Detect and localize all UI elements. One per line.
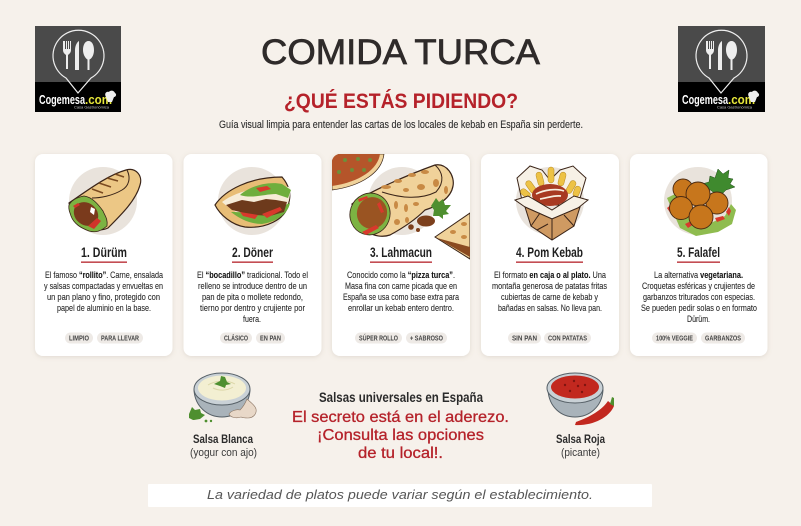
subtitle: ¿QUÉ ESTÁS PIDIENDO? <box>284 90 518 113</box>
heading: 5. Falafel <box>677 245 720 260</box>
heading: 1. Dürüm <box>81 245 127 260</box>
icon: durum wrap <box>69 167 141 235</box>
logo left: Casa Gastronómica <box>74 106 109 110</box>
footer note: La variedad de platos puede variar según el establecimiento. <box>207 487 593 502</box>
description: bañadas en salsas. No lleva pan. <box>498 303 602 313</box>
icon: falafel <box>664 167 736 236</box>
tags: SÚPER ROLLO <box>359 334 398 342</box>
description: Conocido como la “pizza turca”. <box>347 270 463 280</box>
logo right <box>678 26 765 112</box>
label: red sauce <box>556 434 606 459</box>
tags: LIMPIO <box>69 336 89 342</box>
panel: Falafel <box>630 154 768 356</box>
description: enrollar un kebab entero dentro. <box>348 303 454 313</box>
panel: Lahmacun <box>332 154 470 356</box>
description: garbanzos triturados con especias. <box>643 292 755 302</box>
icon: lahmacun wrap <box>332 154 470 259</box>
panel: Dürüm <box>35 154 172 356</box>
sauce text: El secreto está en el aderezo. <box>292 409 509 426</box>
description: fuera. <box>243 314 261 324</box>
tags: EN PAN <box>260 336 281 342</box>
description: Dürüm. <box>687 314 710 324</box>
heading: 3. Lahmacun <box>370 245 432 260</box>
logo right: Cogemesa <box>682 92 729 107</box>
label: white sauce: (yogur con ajo) <box>190 447 257 459</box>
description: relleno se introduce dentro de un <box>198 281 307 291</box>
panel: Pom Kebab <box>481 154 619 356</box>
icon: white sauce <box>189 373 256 422</box>
label: white sauce: Salsa Blanca <box>193 434 254 446</box>
description: montaña generosa de patatas fritas <box>492 281 607 291</box>
tags <box>220 332 285 344</box>
panel: Döner <box>184 154 322 356</box>
intro text: Guía visual limpia para entender las cartas de los locales de kebab en España sin perderte. <box>219 119 583 131</box>
tags: + SABROSO <box>410 336 443 342</box>
description: pan de pita o mollete redondo, <box>202 292 303 302</box>
sauce text: ¡Consulta las opciones <box>317 427 484 444</box>
tags <box>65 332 143 344</box>
description: España se usa como base extra para <box>343 292 459 302</box>
label: red sauce: Salsa Roja <box>556 434 606 446</box>
description: cubiertas de carne de kebab y <box>501 292 598 302</box>
description: Croquetas esféricas y crujientes de <box>642 281 755 291</box>
icon: red sauce <box>547 373 614 425</box>
description: Masa fina con carne picada que en <box>345 281 457 291</box>
description: y salsas compactadas y envueltas en <box>44 281 163 291</box>
description: tierno por dentro y crujiente por <box>200 303 305 313</box>
description: El formato en caja o al plato. Una <box>494 270 610 280</box>
icon: doner pita <box>215 167 291 235</box>
logo left: Cogemesa <box>39 92 86 107</box>
logo left <box>35 26 121 112</box>
description: El famoso “rollito”. Carne, ensalada <box>45 270 177 280</box>
tags <box>355 332 447 344</box>
label: red sauce: (picante) <box>561 447 600 459</box>
description: un pan plano y fino, protegido con <box>47 292 160 302</box>
tags <box>652 332 745 344</box>
label: white sauce <box>190 434 257 459</box>
logo left: .com <box>85 92 112 107</box>
description: papel de aluminio en la base. <box>57 303 151 313</box>
tags: CON PATATAS <box>548 336 587 342</box>
logo right: Casa Gastronómica <box>717 106 752 110</box>
description: La alternativa vegetariana. <box>654 270 753 280</box>
tags: 100% VEGGIE <box>656 336 693 342</box>
tags: CLÁSICO <box>224 334 248 342</box>
title: COMIDA TURCA <box>261 33 541 72</box>
tags <box>508 332 591 344</box>
heading: 4. Pom Kebab <box>516 245 583 260</box>
description: Se pueden pedir solas o en formato <box>641 303 757 313</box>
icon: pom kebab box <box>515 166 588 240</box>
tags: SIN PAN <box>512 336 537 342</box>
sauce text <box>292 390 509 462</box>
tags: PARA LLEVAR <box>101 336 139 342</box>
description: El “bocadillo” tradicional. Todo el <box>197 270 322 280</box>
logo right: .com <box>728 92 755 107</box>
footer note <box>148 484 652 507</box>
tags: GARBANZOS <box>705 336 741 342</box>
sauce text: de tu local!. <box>358 445 443 462</box>
heading: 2. Döner <box>232 245 274 260</box>
sauce text: Salsas universales en España <box>319 390 483 405</box>
